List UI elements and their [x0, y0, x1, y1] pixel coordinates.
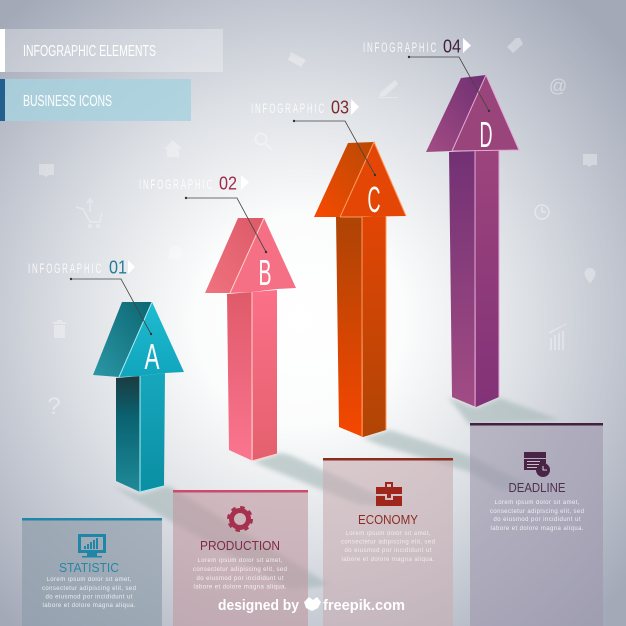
icon: freepik logo: [304, 597, 321, 611]
icon: phone bubble: [168, 246, 183, 260]
arrow A: A: [144, 336, 160, 377]
arrow C: [314, 142, 406, 437]
arrow D: [426, 75, 519, 407]
icon: pencil: [379, 80, 398, 98]
panel: economy: Lorem ipsum dolor sit amet,: [346, 531, 431, 537]
icon: envelope: [288, 52, 306, 67]
label 02: INFOGRAPHIC: [139, 177, 214, 192]
label 02: [139, 174, 249, 194]
label 01: 01: [109, 258, 127, 278]
arrow B: B: [258, 252, 272, 293]
panel: production: PRODUCTION: [200, 538, 280, 553]
icon: search: [256, 134, 272, 150]
icon: at sign: @: [549, 76, 567, 96]
panel: statistic: do eiusmod por incididunt ut: [46, 594, 133, 600]
header bar: business icons: BUSINESS ICONS: [23, 93, 112, 110]
label 01: [28, 258, 135, 278]
panel: statistic: STATISTIC: [59, 560, 119, 575]
watermark: designed by: [218, 598, 299, 614]
panel: statistic: Lorem ipsum dolor sit amet,: [46, 577, 132, 583]
watermark: freepik.com: [323, 598, 405, 614]
icon: question mark: ?: [47, 393, 61, 420]
leader dots: [70, 56, 490, 335]
icon: tag: [507, 38, 523, 53]
panel: economy: ECONOMY: [358, 512, 418, 527]
panel: statistic: labore et dolore magna aliqua.: [42, 603, 136, 609]
header bar: business icons: [0, 79, 191, 121]
icon: monitor: [78, 534, 106, 558]
icon: briefcase: [376, 482, 402, 506]
icon: home: [164, 140, 182, 157]
panel: economy: do eiusmod por incididunt ut: [344, 548, 432, 554]
panel: economy: [323, 458, 453, 626]
panel: deadline: labore et dolore magna aliqua.: [490, 526, 584, 532]
label 03: 03: [331, 98, 349, 118]
arrow shadows: [112, 397, 560, 590]
icon: calendar: [524, 452, 550, 477]
panel: economy: labore et dolore magna aliqua.: [342, 557, 435, 563]
label 03: INFOGRAPHIC: [251, 101, 326, 116]
panel: deadline: [470, 423, 603, 626]
panel: statistic: consectetur adipiscing elit, sed: [42, 586, 136, 592]
faint background icons: [39, 38, 597, 350]
icon: bars: [549, 323, 567, 350]
watermark: [218, 597, 405, 614]
label 04: 04: [443, 36, 461, 56]
panel: deadline: consectetur adipiscing elit, sed: [490, 509, 584, 515]
label 04: INFOGRAPHIC: [363, 40, 438, 55]
header bar: infographic elements: INFOGRAPHIC ELEMENTS: [23, 43, 156, 60]
icon: chat bubble right: [583, 154, 597, 167]
panel: production: Lorem ipsum dolor sit amet,: [198, 558, 283, 564]
icon: chat bubble: [39, 164, 54, 177]
panel: production: consectetur adipiscing elit, sed: [193, 567, 287, 573]
panel: production: do eiusmod por incididunt ut: [196, 576, 284, 582]
panel: deadline: do eiusmod por incididunt ut: [494, 517, 581, 523]
header bar: infographic elements: [0, 29, 223, 72]
label 03: [251, 98, 359, 118]
label 04: [363, 36, 471, 56]
icon: trash: [53, 320, 66, 338]
arrow B: [205, 218, 296, 461]
panel: deadline: DEADLINE: [508, 480, 566, 495]
arrow A: [93, 302, 184, 492]
label 01: INFOGRAPHIC: [28, 261, 103, 276]
icon: gear: [228, 508, 252, 530]
arrow D: D: [480, 114, 492, 155]
panel: production: [173, 490, 308, 626]
label 02: 02: [219, 174, 237, 194]
panel: deadline: Lorem ipsum dolor sit amet,: [494, 500, 580, 506]
icon: location pin: [584, 268, 596, 284]
panel: production: labore et dolore magna aliqua.: [194, 584, 287, 590]
arrow C: C: [368, 179, 380, 220]
icon: cart: [76, 199, 102, 227]
icon: clock: [535, 205, 549, 219]
panel: economy: consectetur adipiscing elit, sed: [341, 540, 435, 546]
leader lines: [71, 57, 489, 334]
panel: statistic: [22, 518, 162, 626]
